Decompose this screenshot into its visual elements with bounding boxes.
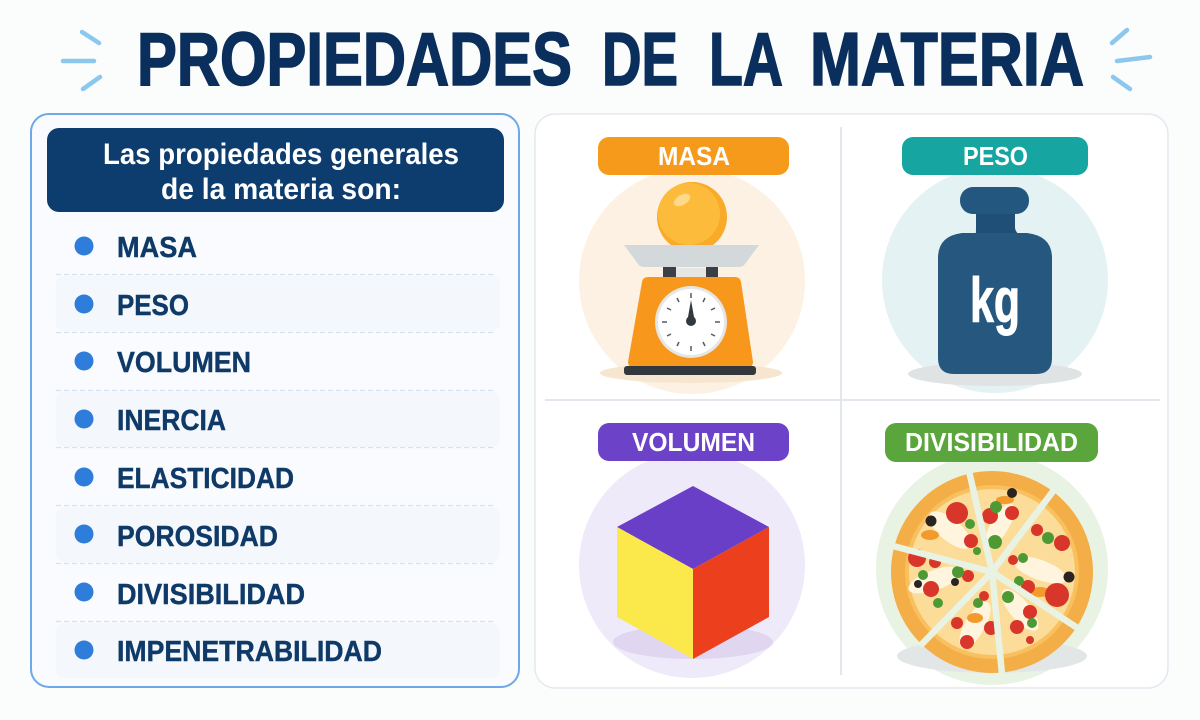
list item: peso — [74, 290, 189, 322]
panel: illustrated properties — [535, 114, 1168, 688]
card: divisibilidad — [876, 423, 1108, 685]
list item: peso: PESO — [117, 290, 189, 322]
title: DE — [602, 17, 678, 101]
title: LA — [709, 17, 783, 101]
list item: inercia: INERCIA — [117, 405, 226, 437]
title: PROPIEDADES — [137, 17, 572, 101]
icon: sliced pizza — [876, 453, 1108, 685]
icon: kilogram weight — [882, 167, 1108, 393]
list item: elasticidad: ELASTICIDAD — [117, 463, 294, 495]
list item: masa: MASA — [117, 232, 197, 264]
label: volumen: VOLUMEN — [632, 427, 755, 457]
list header: Las propiedades generales — [103, 138, 459, 171]
label: peso — [902, 137, 1088, 175]
title — [137, 17, 1084, 101]
icon: left sparkle — [63, 32, 100, 89]
list item: volumen: VOLUMEN — [117, 347, 251, 379]
list item: porosidad: POROSIDAD — [117, 521, 278, 553]
label: masa — [598, 137, 789, 175]
icon: cube — [579, 452, 805, 678]
list item: masa — [74, 232, 197, 264]
label: peso: PESO — [963, 141, 1028, 171]
icon: kilogram weight: kg — [970, 266, 1020, 336]
list item: inercia — [74, 405, 226, 437]
card: volumen — [579, 423, 805, 678]
list item: impenetrabilidad: IMPENETRABILIDAD — [117, 636, 382, 668]
title: MATERIA — [810, 17, 1084, 101]
panel: general properties list — [31, 114, 519, 687]
label: volumen — [598, 423, 789, 461]
label: masa: MASA — [658, 141, 730, 171]
icon: right sparkle — [1112, 30, 1150, 89]
list header — [47, 128, 504, 212]
card: masa — [579, 137, 805, 394]
label: divisibilidad — [885, 423, 1098, 462]
icon: kitchen scale — [579, 168, 805, 394]
card: peso — [882, 137, 1108, 393]
list item: divisibilidad: DIVISIBILIDAD — [117, 579, 305, 611]
label: divisibilidad: DIVISIBILIDAD — [905, 427, 1078, 457]
list header: de la materia son: — [161, 173, 401, 206]
